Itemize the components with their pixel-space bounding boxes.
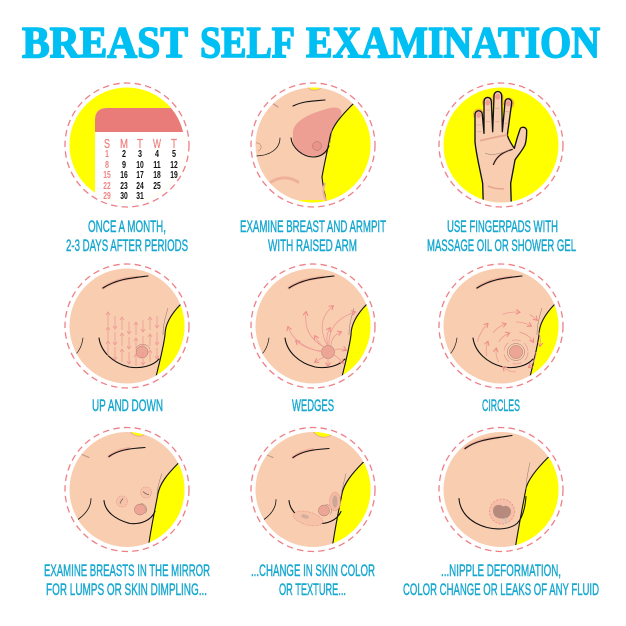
caption bbox=[44, 562, 210, 599]
calendar dates: 10 bbox=[136, 160, 144, 171]
caption: OR TEXTURE... bbox=[279, 581, 346, 599]
panel: up and down bbox=[64, 263, 190, 412]
caption: ONCE A MONTH, bbox=[88, 218, 166, 236]
calendar dates: 12 bbox=[170, 160, 178, 171]
panel: once a month bbox=[65, 83, 197, 255]
title: EXAMINATION bbox=[306, 18, 600, 67]
illustration: lumps bbox=[70, 432, 184, 547]
caption: WEDGES bbox=[292, 397, 334, 415]
calendar dates: T bbox=[171, 136, 177, 151]
icon: calendar bbox=[70, 88, 184, 202]
caption bbox=[240, 218, 386, 255]
calendar dates: 18 bbox=[153, 170, 161, 181]
caption: UP AND DOWN bbox=[92, 397, 163, 415]
calendar dates: 29 bbox=[103, 191, 111, 202]
calendar dates: 23 bbox=[120, 181, 128, 192]
calendar dates: W bbox=[153, 136, 161, 151]
calendar dates: 30 bbox=[120, 191, 128, 202]
calendar dates: 25 bbox=[153, 181, 161, 192]
calendar dates: T bbox=[137, 136, 143, 151]
calendar dates: S bbox=[104, 136, 110, 151]
caption bbox=[403, 562, 599, 599]
panel: breast and armpit bbox=[240, 83, 386, 255]
panel: nipple deformation bbox=[403, 428, 599, 599]
illustration: circular arrows bbox=[444, 268, 558, 384]
caption: EXAMINE BREASTS IN THE MIRROR bbox=[44, 562, 210, 580]
calendar dates: 19 bbox=[170, 170, 178, 181]
calendar dates: M bbox=[120, 136, 128, 151]
calendar dates: 1 bbox=[105, 149, 109, 160]
caption: ...CHANGE IN SKIN COLOR bbox=[251, 562, 375, 580]
calendar dates bbox=[103, 136, 178, 202]
caption: 2-3 DAYS AFTER PERIODS bbox=[66, 237, 188, 255]
calendar dates: 8 bbox=[105, 160, 109, 171]
calendar dates: 31 bbox=[136, 191, 144, 202]
caption: CIRCLES bbox=[482, 397, 520, 415]
illustration: deformed nipple bbox=[444, 432, 558, 547]
panel: lumps or dimpling bbox=[44, 428, 210, 599]
calendar dates: 16 bbox=[120, 170, 128, 181]
calendar dates: 24 bbox=[136, 181, 144, 192]
calendar dates: 4 bbox=[155, 149, 159, 160]
panel: fingerpads bbox=[427, 83, 576, 255]
title: SELF bbox=[200, 18, 295, 67]
calendar dates: 15 bbox=[103, 170, 111, 181]
calendar dates: 17 bbox=[136, 170, 144, 181]
panel: wedges bbox=[250, 263, 376, 412]
caption: EXAMINE BREAST AND ARMPIT bbox=[240, 218, 386, 236]
icon: hand bbox=[443, 87, 559, 207]
caption bbox=[66, 218, 188, 255]
calendar dates: 2 bbox=[122, 149, 126, 160]
panel: skin color change bbox=[250, 426, 376, 596]
caption bbox=[251, 562, 375, 599]
calendar dates: 22 bbox=[103, 181, 111, 192]
caption: FOR LUMPS OR SKIN DIMPLING... bbox=[46, 581, 207, 599]
title bbox=[22, 18, 600, 67]
calendar dates: 9 bbox=[122, 160, 126, 171]
calendar dates: 11 bbox=[153, 160, 161, 171]
calendar dates: 5 bbox=[172, 149, 176, 160]
illustration: skin patches bbox=[256, 432, 370, 547]
illustration: up and down arrows bbox=[70, 268, 184, 384]
caption bbox=[427, 218, 576, 255]
caption: WITH RAISED ARM bbox=[268, 237, 357, 255]
panel: circles bbox=[438, 263, 564, 412]
illustration: wedge arrows bbox=[256, 268, 370, 384]
calendar dates: 3 bbox=[138, 149, 142, 160]
title: BREAST bbox=[22, 18, 188, 67]
illustration: raised arm torso bbox=[256, 88, 370, 202]
